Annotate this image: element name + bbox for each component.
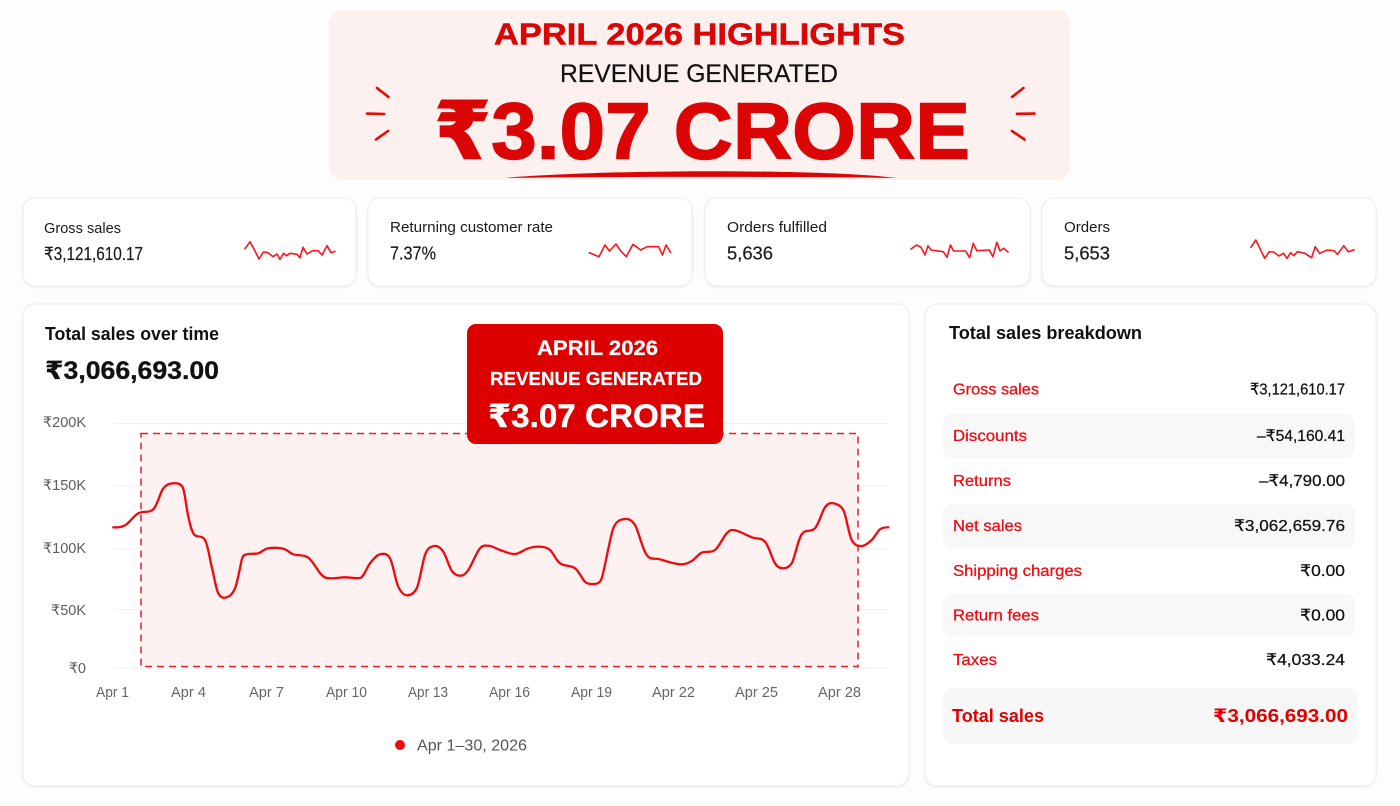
row: returns (953, 473, 1345, 490)
x axis labels: Apr 25 (735, 685, 778, 701)
x axis labels: Apr 19 (571, 685, 612, 701)
row: net sales (943, 504, 1355, 548)
metric card: orders: Orders (1064, 219, 1110, 236)
metric card: returning customer rate: Returning customer rate (390, 219, 553, 236)
sparkline: orders (1251, 240, 1354, 258)
row: shipping charges: Shipping charges (953, 563, 1082, 580)
y axis labels: ₹200K (43, 415, 86, 431)
icon: left burst marks (367, 88, 388, 140)
chart heading: Total sales over time (45, 324, 219, 344)
sparkline: gross sales (245, 242, 335, 259)
row: taxes (953, 652, 1345, 669)
x axis labels: Apr 13 (408, 685, 448, 701)
metric card: orders fulfilled: 5,636 (727, 244, 773, 264)
chart legend: Apr 1–30, 2026 (417, 738, 527, 754)
y axis labels: ₹0 (69, 661, 86, 677)
x axis labels: Apr 28 (818, 685, 861, 701)
line chart (43, 415, 888, 701)
row: taxes: ₹4,033.24 (1266, 652, 1345, 669)
header banner (329, 10, 1070, 180)
headline revenue figure: ₹3.07 CRORE (434, 86, 970, 176)
callout: april revenue (467, 324, 723, 444)
row: return fees (943, 594, 1355, 637)
metric card: returning customer rate (368, 198, 692, 286)
y axis labels: ₹150K (43, 478, 86, 494)
x axis labels (96, 685, 861, 701)
row: return fees: Return fees (953, 608, 1039, 624)
metric card: gross sales: ₹3,121,610.17 (44, 244, 143, 264)
row: gross sales (953, 382, 1345, 398)
x axis labels: Apr 10 (326, 685, 367, 701)
x axis labels: Apr 7 (249, 685, 284, 701)
row: return fees: ₹0.00 (1300, 608, 1345, 624)
sparkline: returning customer rate (589, 244, 670, 257)
row: net sales: Net sales (953, 518, 1022, 535)
metric card: orders: 5,653 (1064, 244, 1110, 264)
title: APRIL 2026 HIGHLIGHTS (494, 16, 905, 52)
row: returns: –₹4,790.00 (1259, 473, 1345, 490)
metric card: gross sales: Gross sales (44, 220, 121, 237)
y axis labels (43, 415, 86, 677)
row: discounts: –₹54,160.41 (1257, 428, 1345, 445)
row: shipping charges (953, 563, 1345, 580)
subtitle: REVENUE GENERATED (560, 60, 838, 88)
row: shipping charges: ₹0.00 (1300, 563, 1345, 580)
row: discounts: Discounts (953, 428, 1027, 445)
callout: april revenue: REVENUE GENERATED (490, 368, 702, 389)
row: total sales (943, 688, 1358, 744)
metric card: returning customer rate: 7.37% (390, 244, 436, 264)
panel: total sales breakdown (925, 304, 1376, 786)
icon: right burst marks (1012, 88, 1034, 140)
metric card: orders fulfilled (705, 198, 1030, 286)
callout: april revenue: APRIL 2026 (537, 337, 658, 360)
metric card: orders fulfilled: Orders fulfilled (727, 219, 827, 236)
headline underline swoosh (504, 171, 897, 178)
row: gross sales: ₹3,121,610.17 (1250, 382, 1345, 398)
row: total sales: Total sales (952, 705, 1044, 726)
panel: total sales over time (23, 304, 909, 786)
y axis labels: ₹50K (51, 603, 86, 619)
metric card: gross sales (23, 198, 356, 286)
row: net sales: ₹3,062,659.76 (1234, 518, 1345, 535)
x axis labels: Apr 4 (171, 685, 206, 701)
callout: april revenue: ₹3.07 CRORE (488, 398, 705, 434)
x axis labels: Apr 1 (96, 685, 129, 701)
sales line (113, 483, 888, 598)
x axis labels: Apr 16 (489, 685, 530, 701)
row: discounts (943, 414, 1355, 458)
row: returns: Returns (953, 473, 1011, 490)
row: total sales: ₹3,066,693.00 (1213, 705, 1348, 726)
row: taxes: Taxes (953, 652, 997, 669)
sparkline: orders fulfilled (911, 242, 1008, 258)
metric card: orders (1042, 198, 1376, 286)
chart total value: ₹3,066,693.00 (45, 357, 219, 385)
breakdown heading: Total sales breakdown (949, 323, 1142, 343)
y axis labels: ₹100K (43, 541, 86, 557)
highlighted date range (141, 434, 858, 666)
x axis labels: Apr 22 (652, 685, 695, 701)
row: gross sales: Gross sales (953, 382, 1039, 398)
